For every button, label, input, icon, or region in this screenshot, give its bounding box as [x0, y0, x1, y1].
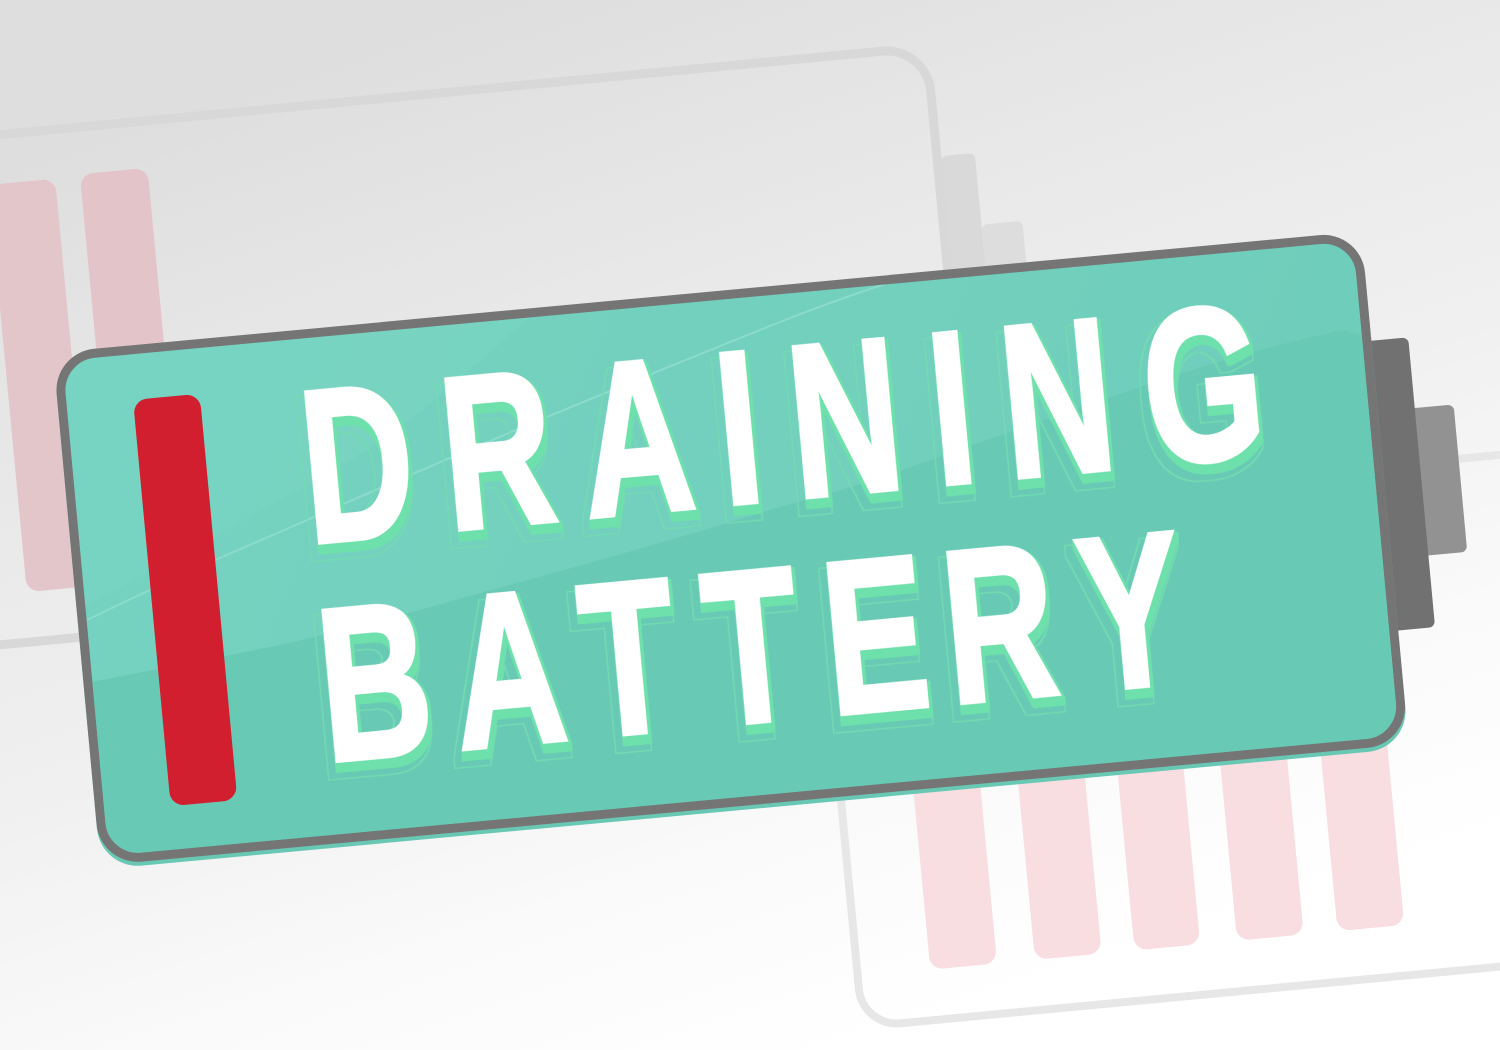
- battery terminal: outer light grey cap: [1404, 404, 1467, 556]
- ghost battery: lower right: [815, 388, 1500, 1027]
- ghost battery: upper left: [0, 40, 1053, 677]
- battery teal lower edge: [53, 235, 1409, 869]
- battery body: [58, 236, 1404, 861]
- red low-charge bar: [133, 394, 237, 806]
- battery gloss reflections: [40, 284, 1420, 880]
- title: BATTERY: BATTERY: [309, 485, 1192, 808]
- battery terminal: inner dark grey cap: [1357, 337, 1435, 632]
- title: DRAINING: DRAINING: [291, 258, 1273, 589]
